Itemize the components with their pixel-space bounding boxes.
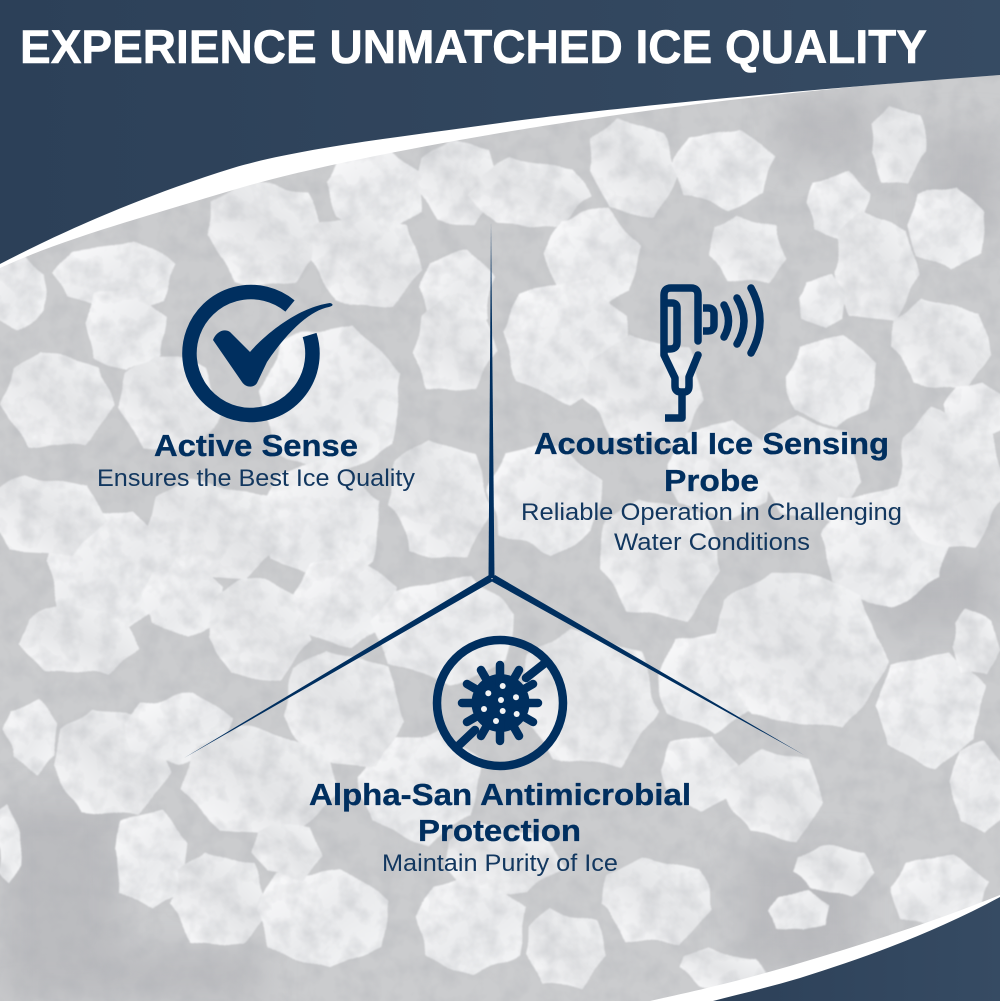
text: acoustical probe description (521, 499, 902, 556)
three-way divider lines (184, 222, 804, 758)
heading: active sense: Active Sense (154, 428, 358, 463)
text: acoustical probe description: Reliable Operation in Challenging (521, 499, 902, 526)
heading: acoustical ice sensing probe: Probe (664, 463, 759, 498)
panel: acoustical probe (521, 288, 902, 556)
heading: alpha-san antimicrobial protection: Protection (418, 813, 581, 848)
title: EXPERIENCE UNMATCHED ICE QUALITY (20, 20, 927, 73)
icon: acoustic probe with sound waves (662, 288, 760, 418)
footer corner: navy swoosh with white edge (650, 895, 1000, 1001)
text: acoustical probe description: Water Conditions (614, 529, 810, 556)
heading: acoustical ice sensing probe: Acoustical Ice Sensing (534, 426, 889, 461)
header band: navy swoosh with white edge (0, 0, 1000, 268)
text: alpha-san description: Maintain Purity of Ice (382, 850, 618, 877)
icon: check mark in circle (189, 292, 333, 415)
icon: crossed-out microbe (437, 640, 563, 766)
heading: alpha-san antimicrobial protection (309, 777, 691, 848)
panel: alpha-san protection (309, 640, 691, 877)
heading: alpha-san antimicrobial protection: Alpha-San Antimicrobial (309, 777, 691, 812)
heading: acoustical ice sensing probe (534, 426, 889, 498)
panel: active sense (97, 292, 415, 492)
text: active sense description: Ensures the Best Ice Quality (97, 465, 415, 492)
